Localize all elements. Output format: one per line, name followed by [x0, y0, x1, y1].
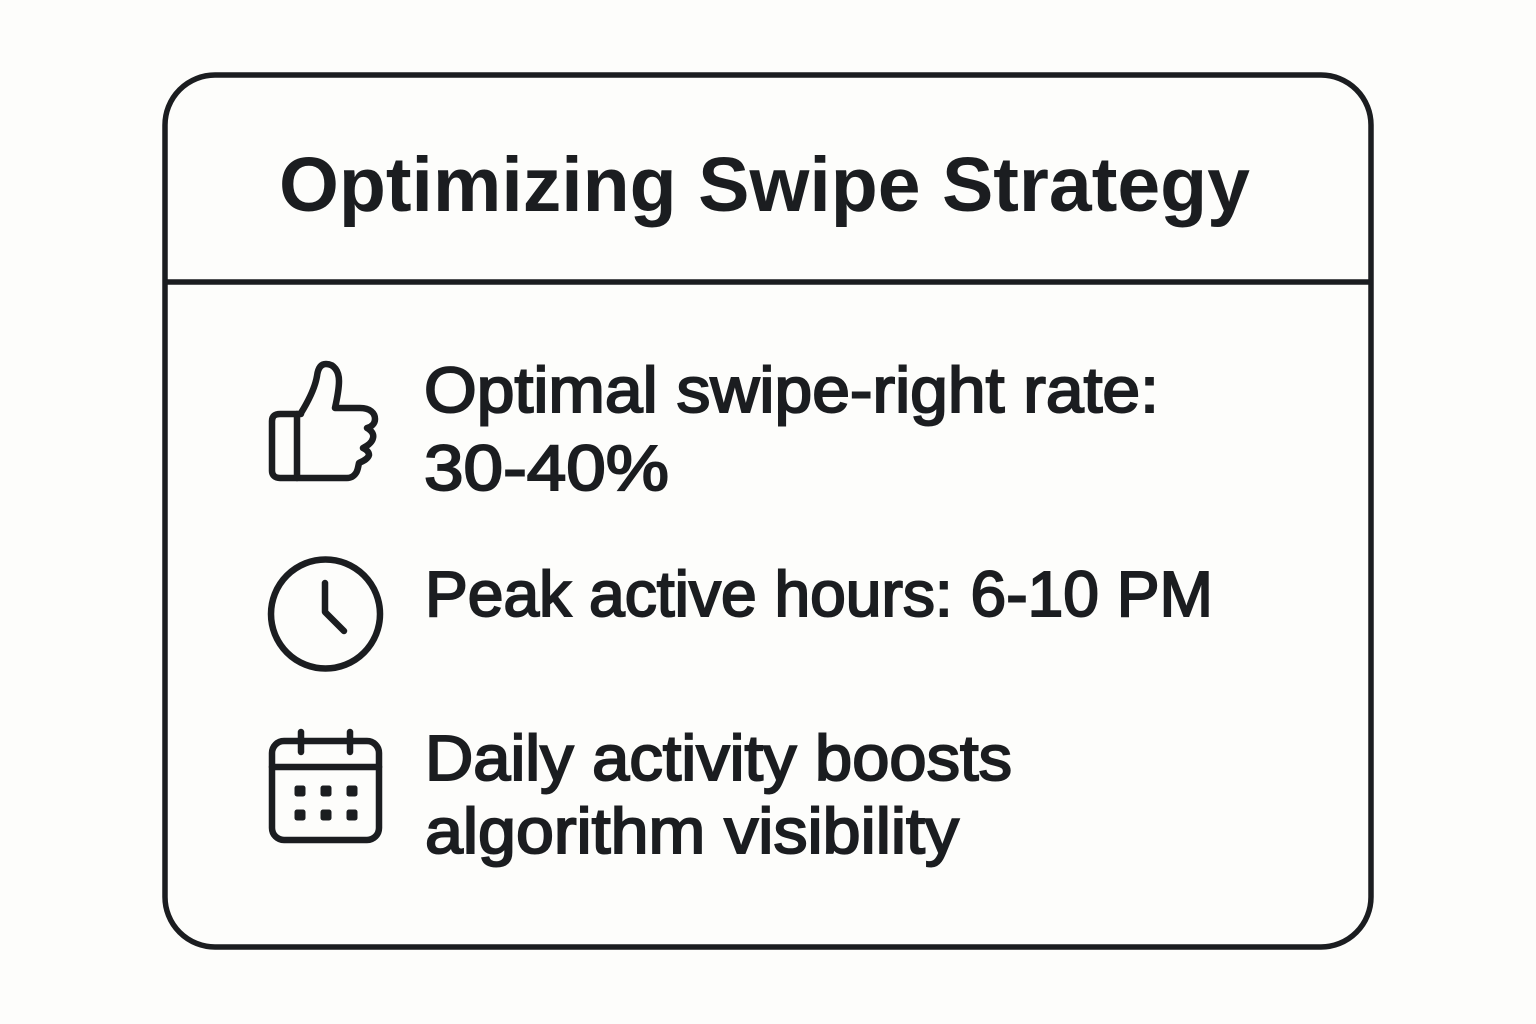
text: swipe-right rate — [424, 354, 1159, 504]
panel: main card — [165, 75, 1371, 947]
title: Optimizing Swipe Strategy — [279, 142, 1250, 228]
text: peak active hours: Peak active hours: 6-10 PM — [425, 558, 1213, 630]
icon: thumbs up — [272, 364, 375, 478]
text: swipe-right rate: Optimal swipe-right rate: — [424, 354, 1159, 426]
icon: calendar — [272, 732, 379, 840]
text: swipe-right rate: 30-40% — [424, 432, 669, 504]
icon: clock — [271, 560, 380, 668]
text: daily activity: Daily activity boosts — [425, 722, 1012, 794]
text: daily activity: algorithm visibility — [425, 795, 959, 867]
text: daily activity — [425, 722, 1012, 867]
